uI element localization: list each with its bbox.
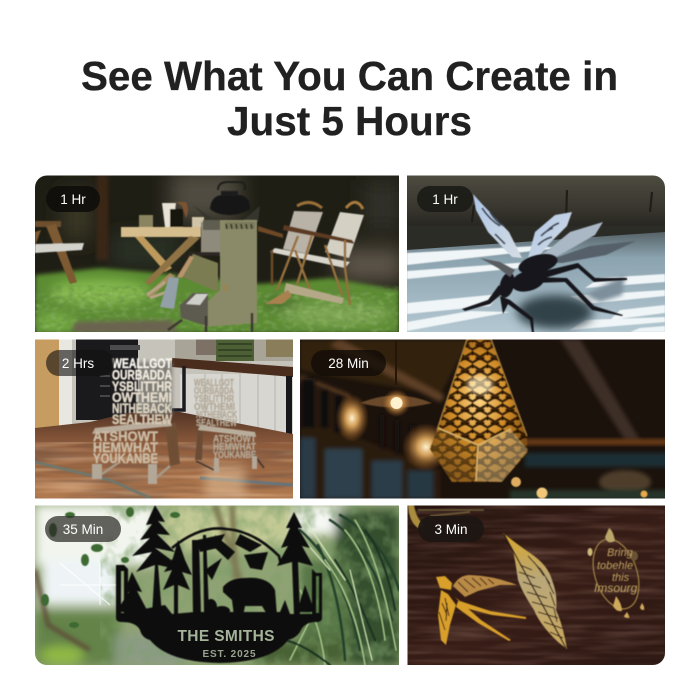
wood floor [35, 410, 293, 499]
badge: 1 Hr: 1 Hr [60, 192, 86, 207]
small word chair: OURBADDA [194, 386, 234, 397]
panel: word chairs, 2 Hrs [35, 339, 293, 499]
right-hand bokeh [510, 439, 670, 500]
small word chair: ATSHOWT [213, 434, 256, 445]
wasp body [462, 250, 627, 333]
title: Just 5 Hours [227, 98, 472, 144]
badge: 35 Min [45, 516, 121, 542]
wasp shadow [517, 295, 593, 329]
geometric lamp [430, 339, 528, 482]
badge: 3 Min: 3 Min [434, 522, 468, 537]
large word chair: ATSHOWT [93, 428, 158, 444]
warm background lights [336, 342, 440, 470]
large word chair [92, 355, 180, 484]
badge: 1 Hr [46, 186, 100, 212]
large word chair: OWTHEMI [112, 389, 172, 405]
rocket stove [160, 205, 260, 332]
title [81, 53, 618, 144]
sign lettering: THE SMITHS [178, 628, 274, 645]
workbench and wall panels [172, 340, 293, 434]
sign lettering [178, 628, 274, 660]
small word chair: YSBLITTHR [194, 394, 235, 405]
wood grain [407, 505, 665, 665]
palm fronds [285, 515, 399, 665]
sign frame and base [116, 565, 322, 663]
panel: pendant lamp, 28 Min [300, 339, 670, 500]
sunlight stripes [407, 246, 665, 332]
canopy branches [197, 534, 268, 580]
large word chair: YOUKANBE [93, 450, 158, 466]
table and coffee set [121, 202, 204, 298]
large word chair: YSBLITTHR [112, 378, 172, 394]
large word chair: NITHEBACK [112, 400, 172, 416]
gold swallow [436, 575, 526, 645]
panel: metal family sign, 35 Min [35, 505, 400, 665]
kettle [210, 182, 250, 215]
badge: 35 Min: 35 Min [63, 522, 103, 537]
script ornament: tobehle [597, 560, 633, 572]
logs [265, 283, 344, 304]
badge: 28 Min: 28 Min [328, 356, 369, 371]
script ornament: Bring [607, 547, 634, 559]
badge: 28 Min [311, 350, 386, 376]
right chairs [258, 202, 364, 305]
tool cabinet [76, 339, 140, 420]
small word chair: WEALLGOT [194, 378, 234, 389]
badge: 3 Min [418, 516, 484, 542]
small word chair [194, 378, 264, 473]
large word chair: SEALTHEW [112, 411, 173, 427]
title: See What You Can Create in [81, 53, 618, 99]
badge: 2 Hrs: 2 Hrs [62, 356, 94, 371]
script ornament [585, 528, 647, 618]
arch [172, 528, 281, 565]
grass [35, 268, 399, 333]
large word chair: OURBADDA [112, 366, 172, 382]
panel: gold bookmarks, 3 Min [407, 505, 665, 665]
small word chair: YOUKANBE [213, 450, 256, 461]
garden background [35, 505, 400, 665]
sign lettering: EST. 2025 [202, 649, 256, 660]
badge: 1 Hr: 1 Hr [432, 192, 458, 207]
black sign silhouette [116, 505, 322, 663]
large word chair: WEALLGOT [112, 355, 172, 371]
panel: metal wasp, 1 Hr [407, 175, 665, 333]
panel: camp stove, 1 Hr [35, 170, 403, 333]
gold feather [503, 533, 567, 649]
top-left gold fragment [408, 505, 484, 528]
ceiling beams and window wall [300, 339, 640, 499]
small word chair: HEMWHAT [213, 442, 256, 453]
pine trees [116, 505, 315, 615]
badge: 2 Hrs [46, 350, 114, 376]
ground grass [128, 600, 312, 618]
script ornament: Imsourg [594, 581, 638, 595]
small word chair: OWTHEMI [194, 402, 235, 413]
script ornament: this [612, 572, 630, 584]
door [35, 339, 59, 429]
large word chair: HEMWHAT [93, 439, 158, 455]
wings [473, 194, 636, 263]
left chair [35, 221, 84, 284]
small word chair: NITHEBACK [196, 410, 238, 421]
bears [205, 578, 277, 616]
wing shadow [585, 275, 625, 302]
small word chair: SEALTHEW [196, 418, 237, 429]
badge: 1 Hr [417, 186, 473, 212]
shaded wall behind large chair [138, 362, 172, 414]
